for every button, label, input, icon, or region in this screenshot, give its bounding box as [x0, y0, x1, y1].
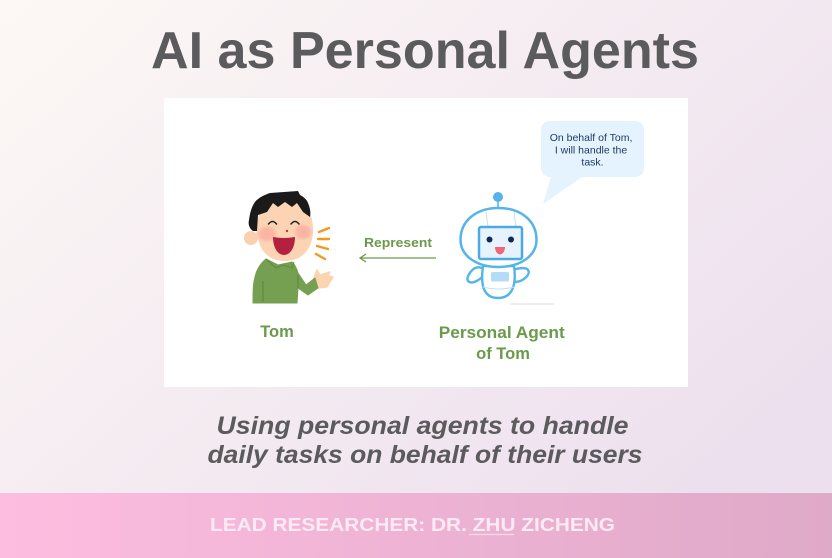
icon: robot agent: [460, 192, 554, 304]
speech bubble: [541, 121, 644, 204]
speech bubble: I will handle the: [555, 144, 627, 156]
nose: [286, 230, 288, 232]
screen: [479, 227, 522, 259]
researcher credit: LEAD RESEARCHER: DR. ZHU ZICHENG: [210, 515, 615, 535]
arms: [467, 267, 485, 282]
head: [460, 208, 536, 267]
speech bubble: On behalf of Tom,: [550, 132, 632, 144]
label: personal agent: Personal Agent: [439, 324, 565, 342]
face: [257, 198, 313, 261]
hair: [249, 191, 310, 231]
speech lines: [316, 228, 329, 259]
arrow: represent: Represent: [364, 235, 433, 250]
shadow: [510, 303, 554, 305]
hand: [314, 270, 333, 288]
body: [253, 259, 318, 303]
title: AI as Personal Agents: [151, 22, 699, 80]
ear: [244, 231, 258, 245]
mouth: [273, 237, 295, 255]
arrow: represent: [360, 235, 436, 262]
eyes: [268, 222, 299, 224]
body: [482, 266, 515, 298]
label: Tom: Tom: [260, 323, 294, 341]
footer band: [0, 493, 832, 558]
subtitle: Using personal agents to handle: [217, 412, 629, 440]
label: personal agent: of Tom: [476, 345, 530, 363]
subtitle: daily tasks on behalf of their users: [208, 441, 643, 469]
speech bubble: task.: [581, 156, 604, 168]
panel: illustration: [164, 98, 688, 387]
icon: Tom character: [244, 191, 333, 303]
cheeks: [256, 225, 278, 243]
